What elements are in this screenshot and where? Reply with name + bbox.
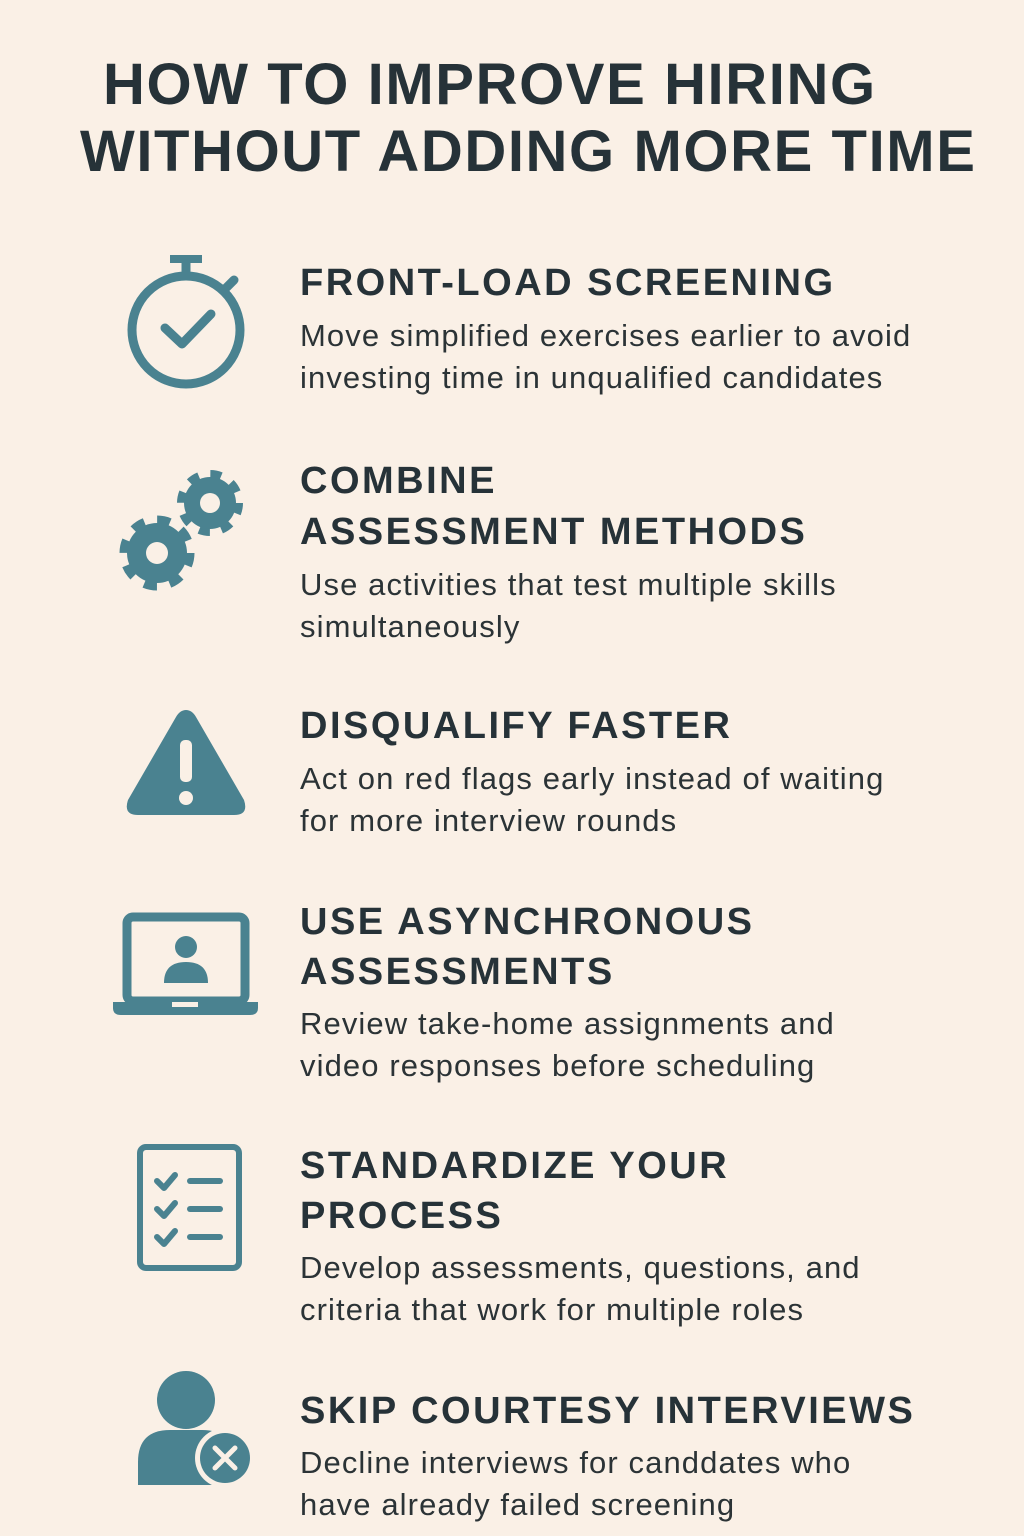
section 1: FRONT-LOAD SCREENING — [300, 262, 836, 304]
section 1: Move simplified exercises earlier to avoid — [300, 318, 911, 353]
section 4: ASSESSMENTS — [300, 951, 615, 993]
section 4 — [300, 901, 835, 1083]
section 3: for more interview rounds — [300, 803, 677, 838]
section 3: Act on red flags early instead of waiting — [300, 761, 884, 796]
section 4: Review take-home assignments and — [300, 1006, 835, 1041]
icon: warning — [127, 710, 245, 815]
section 2: Use activities that test multiple skills — [300, 567, 837, 602]
section 5: STANDARDIZE YOUR — [300, 1145, 729, 1187]
title: HOW TO IMPROVE HIRING — [103, 52, 877, 117]
title: WITHOUT ADDING MORE TIME — [80, 119, 977, 184]
section 4: video responses before scheduling — [300, 1048, 815, 1083]
title — [80, 52, 977, 184]
icon: stopwatch — [132, 255, 240, 384]
section 2: COMBINE — [300, 460, 497, 502]
section 2: simultaneously — [300, 609, 520, 644]
section 5: Develop assessments, questions, and — [300, 1250, 861, 1285]
section 5: criteria that work for multiple roles — [300, 1292, 804, 1327]
section 1 — [300, 262, 911, 395]
icon: laptop — [113, 917, 258, 1015]
section 1: investing time in unqualified candidates — [300, 360, 883, 395]
section 6: have already failed screening — [300, 1487, 735, 1522]
section 3 — [300, 705, 884, 838]
icon: person declined — [138, 1371, 255, 1488]
section 2: ASSESSMENT METHODS — [300, 511, 807, 553]
section 6: Decline interviews for canddates who — [300, 1445, 851, 1480]
icon: gears — [124, 474, 239, 586]
section 6 — [300, 1390, 915, 1522]
section 6: SKIP COURTESY INTERVIEWS — [300, 1390, 915, 1432]
section 5 — [300, 1145, 861, 1327]
section 2 — [300, 460, 837, 644]
section 3: DISQUALIFY FASTER — [300, 705, 732, 747]
section 4: USE ASYNCHRONOUS — [300, 901, 755, 943]
icon: checklist — [140, 1147, 239, 1268]
section 5: PROCESS — [300, 1195, 503, 1237]
